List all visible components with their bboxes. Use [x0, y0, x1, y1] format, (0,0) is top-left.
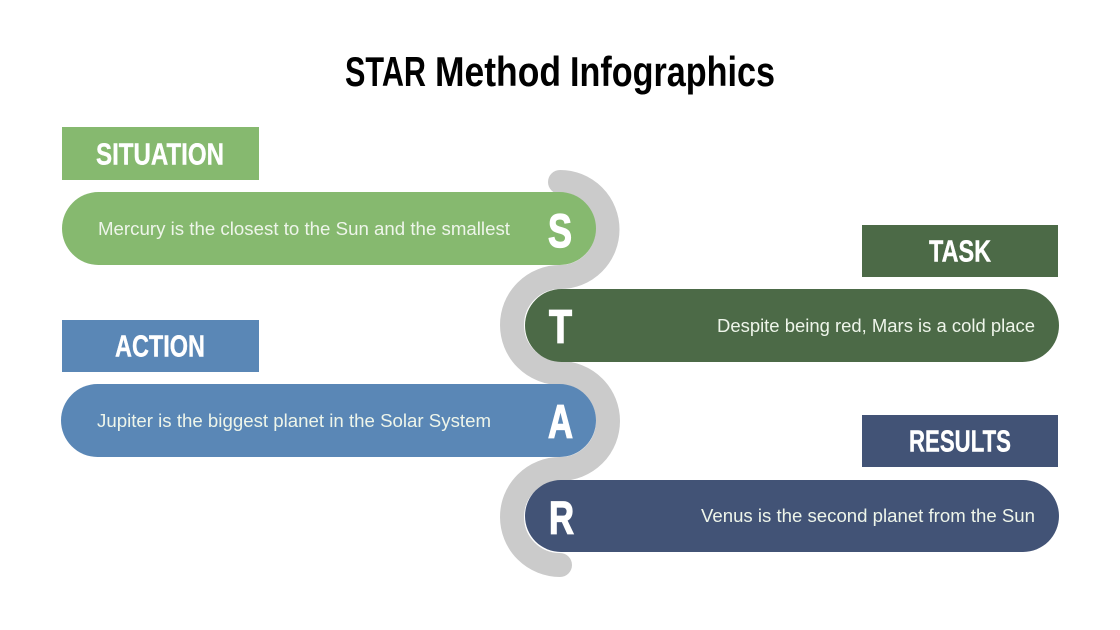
situation heading: SITUATION	[96, 136, 224, 172]
situation pill: Mercury is the closest to the Sun and the smallest	[98, 218, 510, 239]
panel: situation	[62, 127, 596, 265]
action heading	[62, 320, 259, 372]
panel: results	[525, 415, 1059, 552]
action pill: Jupiter is the biggest planet in the Solar System	[97, 410, 491, 431]
results pill: R	[549, 492, 574, 544]
results pill: Venus is the second planet from the Sun	[701, 505, 1035, 526]
task pill	[525, 289, 1059, 362]
results heading: RESULTS	[909, 424, 1011, 458]
situation pill	[62, 192, 596, 265]
results pill	[525, 480, 1059, 552]
task pill: T	[549, 300, 572, 353]
serpentine connector	[512, 182, 608, 565]
situation heading	[62, 127, 259, 180]
task pill: Despite being red, Mars is a cold place	[717, 315, 1035, 336]
situation pill: S	[548, 204, 572, 257]
title: Infographics	[570, 48, 775, 95]
panel: task	[525, 225, 1059, 362]
action pill: A	[548, 395, 573, 448]
title	[345, 48, 775, 95]
task heading: TASK	[929, 234, 991, 268]
action pill	[61, 384, 596, 457]
results heading	[862, 415, 1058, 467]
task heading	[862, 225, 1058, 277]
action heading: ACTION	[115, 328, 205, 364]
title: Method	[435, 48, 561, 95]
title: STAR	[345, 48, 426, 95]
panel: action	[61, 320, 596, 457]
